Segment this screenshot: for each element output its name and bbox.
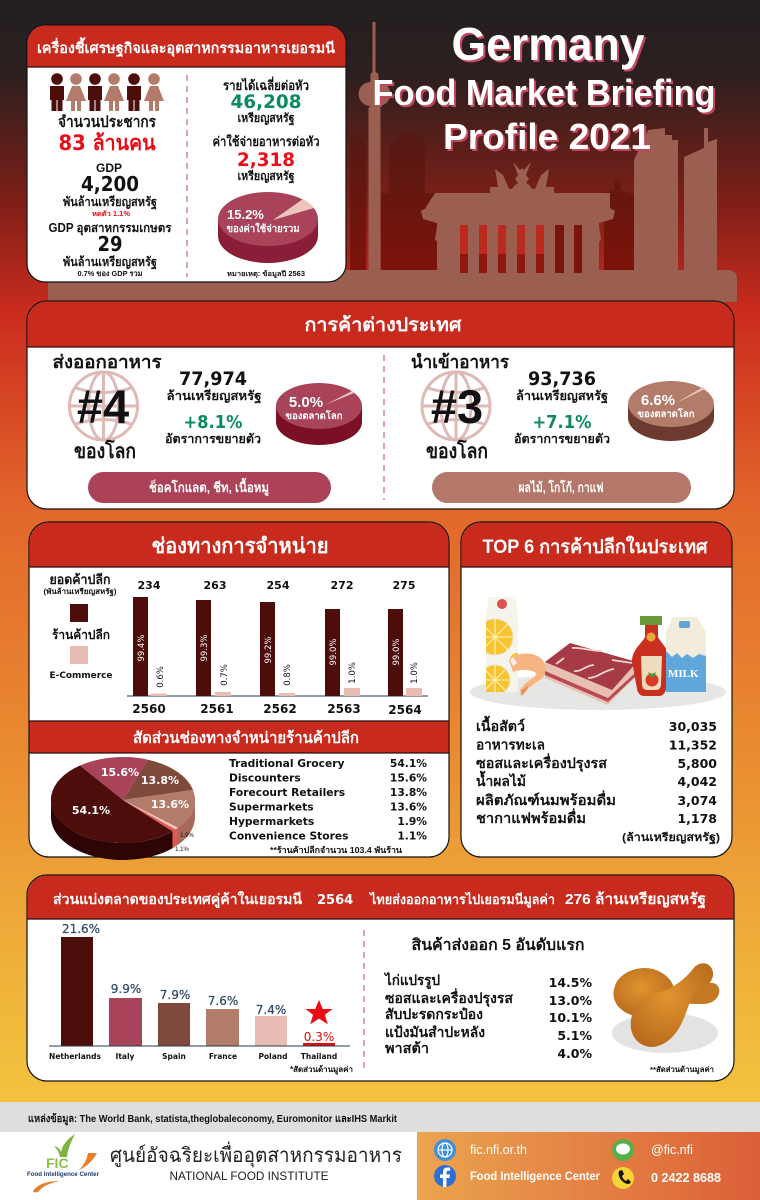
chart legend: (พันล้านเหรียญสหรัฐ)	[44, 587, 117, 597]
retail ranking list: 5,800	[677, 756, 717, 771]
import products pill	[432, 472, 691, 503]
top 5 exports list: ไก่แปรรูป	[383, 971, 440, 989]
logo: FIC	[46, 1155, 69, 1171]
pie chart: import share: ของตลาดโลก	[638, 408, 695, 420]
panel heading: เครื่องชี้เศรษฐกิจและอุตสาหกรรมอาหารเยอรมนี	[37, 37, 335, 58]
income per capita	[223, 76, 309, 126]
bar chart: retail sales: 99.2%	[264, 636, 274, 664]
top 5 exports list: 13.0%	[549, 993, 592, 1008]
pie legend table: Forecourt Retailers	[229, 786, 345, 799]
export rank label: ของโลก	[74, 439, 136, 463]
bar chart: market share: Italy	[116, 1052, 135, 1061]
top 5 exports list: 10.1%	[549, 1010, 592, 1025]
pie legend table: 13.6%	[390, 800, 427, 814]
retail ranking list: ซอสและเครื่องปรุงรส	[476, 753, 607, 772]
chart legend	[44, 572, 117, 681]
food spending per capita: ค่าใช้จ่ายอาหารต่อหัว	[212, 133, 320, 149]
pie legend table: Traditional Grocery	[229, 757, 344, 770]
bar chart: retail sales: 2560	[132, 702, 166, 716]
retail ranking list: ผลิตภัณฑ์นมพร้อมดื่ม	[476, 790, 616, 808]
pie chart: export share: 5.0%	[289, 394, 323, 411]
bar chart: market share: 0.3%	[304, 1030, 334, 1044]
pie chart: retail channel share: 54.1%	[72, 804, 110, 817]
pie chart: retail channel share: 13.8%	[141, 774, 179, 787]
pie legend table: 1.1%	[397, 830, 427, 842]
bar chart: retail sales: 0.6%	[156, 666, 166, 688]
population	[58, 113, 157, 155]
chicken note: **สัดส่วนด้านมูลค่า	[650, 1065, 714, 1075]
agricultural GDP: 29	[98, 232, 122, 256]
pie chart: import share	[628, 381, 714, 441]
pie chart: export share	[276, 383, 362, 445]
panel: foreign trade	[27, 301, 734, 509]
import value: 93,736	[528, 368, 596, 390]
icon: people row	[50, 73, 164, 111]
pie legend table	[229, 757, 427, 842]
retail ranking list: 3,074	[677, 793, 717, 808]
export value: +8.1%	[184, 412, 242, 433]
pie legend table: Discounters	[229, 772, 301, 784]
agricultural GDP	[48, 221, 172, 278]
icon: globe with rank 4: #4	[77, 380, 129, 433]
bar chart: market share: Netherlands	[49, 1052, 101, 1061]
GDP: 4,200	[81, 172, 139, 196]
bar chart: market share: 9.9%	[111, 982, 141, 996]
panel heading: ไทยส่งออกอาหารไปเยอรมนีมูลค่า	[368, 891, 555, 908]
export value	[165, 368, 262, 446]
import rank label: ของโลก	[426, 439, 488, 463]
import heading: นำเข้าอาหาร	[411, 352, 509, 372]
bar chart: market share: 7.4%	[256, 1003, 286, 1017]
import value	[514, 368, 610, 446]
bar chart: retail sales: 2563	[327, 702, 361, 716]
GDP: GDP	[96, 161, 122, 175]
chart legend: ร้านค้าปลีก	[52, 628, 110, 642]
pie chart: retail channel share	[51, 757, 195, 860]
source band: แหล่งข้อมูล: The World Bank, statista,theglobaleconomy, Euromonitor และIHS Markit	[28, 1112, 397, 1126]
retail ranking list: 1,178	[677, 811, 717, 826]
pie legend table: Convenience Stores	[229, 830, 348, 842]
population: จำนวนประชากร	[58, 113, 157, 131]
title	[372, 18, 716, 157]
pie legend table: 54.1%	[390, 757, 427, 770]
import value: อัตราการขยายตัว	[514, 432, 610, 446]
export value: ล้านเหรียญสหรัฐ	[166, 389, 262, 404]
bar chart: retail sales: 99.4%	[137, 634, 147, 662]
top 5 exports list	[383, 971, 592, 1061]
GDP: หดตัว 1.1%	[92, 210, 131, 218]
export products pill: ช็อคโกแลต, ชีท, เนื้อหมู	[149, 477, 269, 496]
export column	[52, 352, 362, 503]
pie chart: retail channel share: 1.1%	[175, 847, 189, 853]
panel heading: ช่องทางการจำหน่าย	[152, 535, 328, 558]
footer left: institute	[0, 1132, 417, 1200]
import column	[411, 352, 714, 503]
top 5 exports list: 14.5%	[549, 975, 592, 990]
agricultural GDP: 0.7% ของ GDP รวม	[78, 269, 143, 278]
panel: trading partner market share	[27, 875, 734, 1081]
bar chart: market share: Poland	[258, 1052, 288, 1061]
bar chart: market share: 21.6%	[62, 922, 100, 936]
bar chart: market share: 7.9%	[160, 988, 190, 1002]
top 5 exports list: 4.0%	[557, 1046, 592, 1061]
icon: red star	[306, 1000, 332, 1024]
food spending per capita	[212, 133, 320, 184]
panel heading	[53, 890, 706, 909]
bar chart: retail sales: 2562	[263, 702, 297, 716]
panel heading: การค้าต่างประเทศ	[304, 314, 462, 336]
bar chart: retail sales: 2561	[200, 702, 234, 716]
pie legend table: 1.9%	[397, 815, 427, 828]
bar chart: market share: Thailand	[301, 1052, 337, 1061]
footer right: contacts	[417, 1132, 760, 1200]
retail ranking list: เนื้อสัตว์	[476, 715, 525, 734]
icon: globe with rank 4	[70, 372, 138, 440]
panel: top 6 retail	[461, 522, 732, 857]
GDP	[63, 161, 157, 218]
icon: fried chicken	[612, 963, 719, 1053]
bar chart: retail sales: 1.0%	[348, 662, 358, 684]
export heading: ส่งออกอาหาร	[52, 352, 162, 372]
source band	[0, 1102, 760, 1132]
pie chart: retail channel share: 15.6%	[101, 766, 139, 779]
icon: globe with rank 3	[422, 372, 490, 440]
pie chart: export share: ของตลาดโลก	[286, 410, 343, 422]
footnote: **ร้านค้าปลีกจำนวน 103.4 พันร้าน	[270, 845, 402, 855]
pie chart: food share of spending	[218, 192, 318, 263]
icon: facebook	[434, 1165, 456, 1187]
retail ranking list: น้ำผลไม้	[476, 770, 526, 789]
bar chart: retail sales: 0.8%	[283, 664, 293, 686]
top 5 exports list: พาสต้า	[385, 1040, 429, 1056]
retail ranking list: 4,042	[677, 774, 717, 789]
income per capita: รายได้เฉลี่ยต่อหัว	[223, 76, 309, 93]
pie chart: retail channel share: 13.6%	[151, 798, 189, 811]
bar chart: retail sales: 0.7%	[220, 664, 230, 686]
GDP: พันล้านเหรียญสหรัฐ	[63, 195, 157, 210]
bar chart: retail sales: 1.0%	[410, 662, 420, 684]
panel heading: TOP 6 การค้าปลีกในประเทศ	[482, 535, 708, 558]
top 5 exports list: แป้งมันสำปะหลัง	[385, 1024, 485, 1040]
title: Food Market Briefing	[372, 72, 716, 113]
panel heading: ส่วนแบ่งตลาดของประเทศคู่ค้าในเยอรมนี	[53, 890, 302, 908]
pie legend table: 13.8%	[390, 786, 427, 799]
bar chart: retail sales: 263	[204, 579, 226, 592]
pie legend table: Supermarkets	[229, 800, 314, 814]
bar chart: retail sales: 254	[267, 579, 290, 592]
bar chart: retail sales: 2564	[388, 703, 422, 717]
population: 83 ล้านคน	[58, 131, 156, 155]
export products pill	[88, 472, 331, 503]
food spending per capita: เหรียญสหรัฐ	[238, 169, 295, 184]
top 5 exports heading: สินค้าส่งออก 5 อันดับแรก	[412, 936, 584, 954]
bar chart: market share	[49, 922, 350, 1061]
pie chart: food share of spending: ของค่าใช้จ่ายรวม	[226, 222, 300, 235]
bar chart: retail sales: 99.3%	[200, 634, 210, 662]
title: Germany	[452, 18, 645, 70]
pie chart: food share of spending: 15.2%	[227, 207, 264, 222]
export value: อัตราการขยายตัว	[165, 432, 261, 446]
institute name	[110, 1141, 402, 1183]
pie chart: retail channel share: 1.9%	[180, 833, 194, 839]
top 5 exports list: ซอสและเครื่องปรุงรส	[385, 988, 513, 1007]
icon: line	[612, 1139, 634, 1161]
bar chart: retail sales: 275	[393, 579, 415, 592]
panel: economic indicators	[27, 25, 346, 282]
facebook text: Food Intelligence Center	[470, 1171, 601, 1183]
income per capita: 46,208	[230, 91, 302, 113]
logo	[27, 1134, 100, 1192]
retail ranking list: 11,352	[669, 738, 717, 752]
panel: distribution channels	[29, 522, 449, 860]
pie legend table: 15.6%	[390, 772, 427, 784]
retail ranking list: ชากาแฟพร้อมดื่ม	[476, 808, 586, 826]
retail ranking list	[476, 715, 717, 826]
retail ranking list: 30,035	[669, 719, 717, 734]
food spending per capita: 2,318	[237, 149, 295, 171]
top 5 exports list: 5.1%	[557, 1028, 592, 1043]
institute name: ศูนย์อัจฉริยะเพื่ออุตสาหกรรมอาหาร	[110, 1141, 402, 1168]
pie legend table: Hypermarkets	[229, 815, 314, 828]
agricultural GDP: GDP อุตสาหกรรมเกษตร	[48, 221, 172, 236]
retail ranking list: อาหารทะเล	[476, 736, 545, 752]
title: Profile 2021	[443, 116, 651, 157]
bar chart: market share: France	[209, 1052, 237, 1061]
panel heading: 276 ล้านเหรียญสหรัฐ	[565, 891, 706, 909]
bar chart note: *สัดส่วนด้านมูลค่า	[290, 1064, 353, 1075]
bar chart: retail sales: 99.0%	[392, 638, 402, 666]
icon: website	[434, 1139, 456, 1161]
sub-heading: retail channel share	[29, 721, 449, 753]
bar chart: retail sales	[127, 579, 428, 717]
bar chart: market share: Spain	[162, 1052, 186, 1061]
phone text: 0 2422 8688	[651, 1170, 721, 1185]
line text: @fic.nfi	[651, 1143, 693, 1157]
chart legend: ยอดค้าปลีก	[50, 572, 111, 587]
import value: +7.1%	[532, 412, 592, 433]
institute name: NATIONAL FOOD INSTITUTE	[170, 1171, 329, 1183]
bar chart: market share: 7.6%	[208, 994, 238, 1008]
unit note: (ล้านเหรียญสหรัฐ)	[622, 831, 720, 845]
icon: food products: MILK	[668, 668, 699, 680]
export value: 77,974	[179, 368, 247, 390]
bar chart: retail sales: 234	[138, 579, 161, 592]
note: หมายเหตุ: ข้อมูลปี 2563	[227, 269, 305, 279]
top 5 exports list: สับปะรดกระป๋อง	[385, 1006, 483, 1022]
icon: food products	[470, 597, 726, 710]
bar chart: retail sales: 99.0%	[329, 638, 339, 666]
import products pill: ผลไม้, โกโก้, กาแฟ	[518, 479, 604, 495]
skyline of Berlin	[48, 22, 737, 302]
pie chart: import share: 6.6%	[641, 392, 675, 409]
bar chart: retail sales: 272	[331, 579, 353, 592]
website text: fic.nfi.or.th	[470, 1143, 527, 1157]
icon: phone	[612, 1167, 634, 1189]
icon: globe with rank 3: #3	[431, 380, 483, 433]
chart legend: E-Commerce	[50, 671, 112, 681]
income per capita: เหรียญสหรัฐ	[238, 111, 295, 126]
agricultural GDP: พันล้านเหรียญสหรัฐ	[63, 255, 157, 270]
import value: ล้านเหรียญสหรัฐ	[516, 389, 608, 404]
panel heading: 2564	[317, 893, 353, 908]
sub-heading: retail channel share: สัดส่วนช่องทางจำหน่ายร้านค้าปลีก	[133, 729, 359, 747]
logo: Food Intelligence Center	[27, 1172, 100, 1178]
